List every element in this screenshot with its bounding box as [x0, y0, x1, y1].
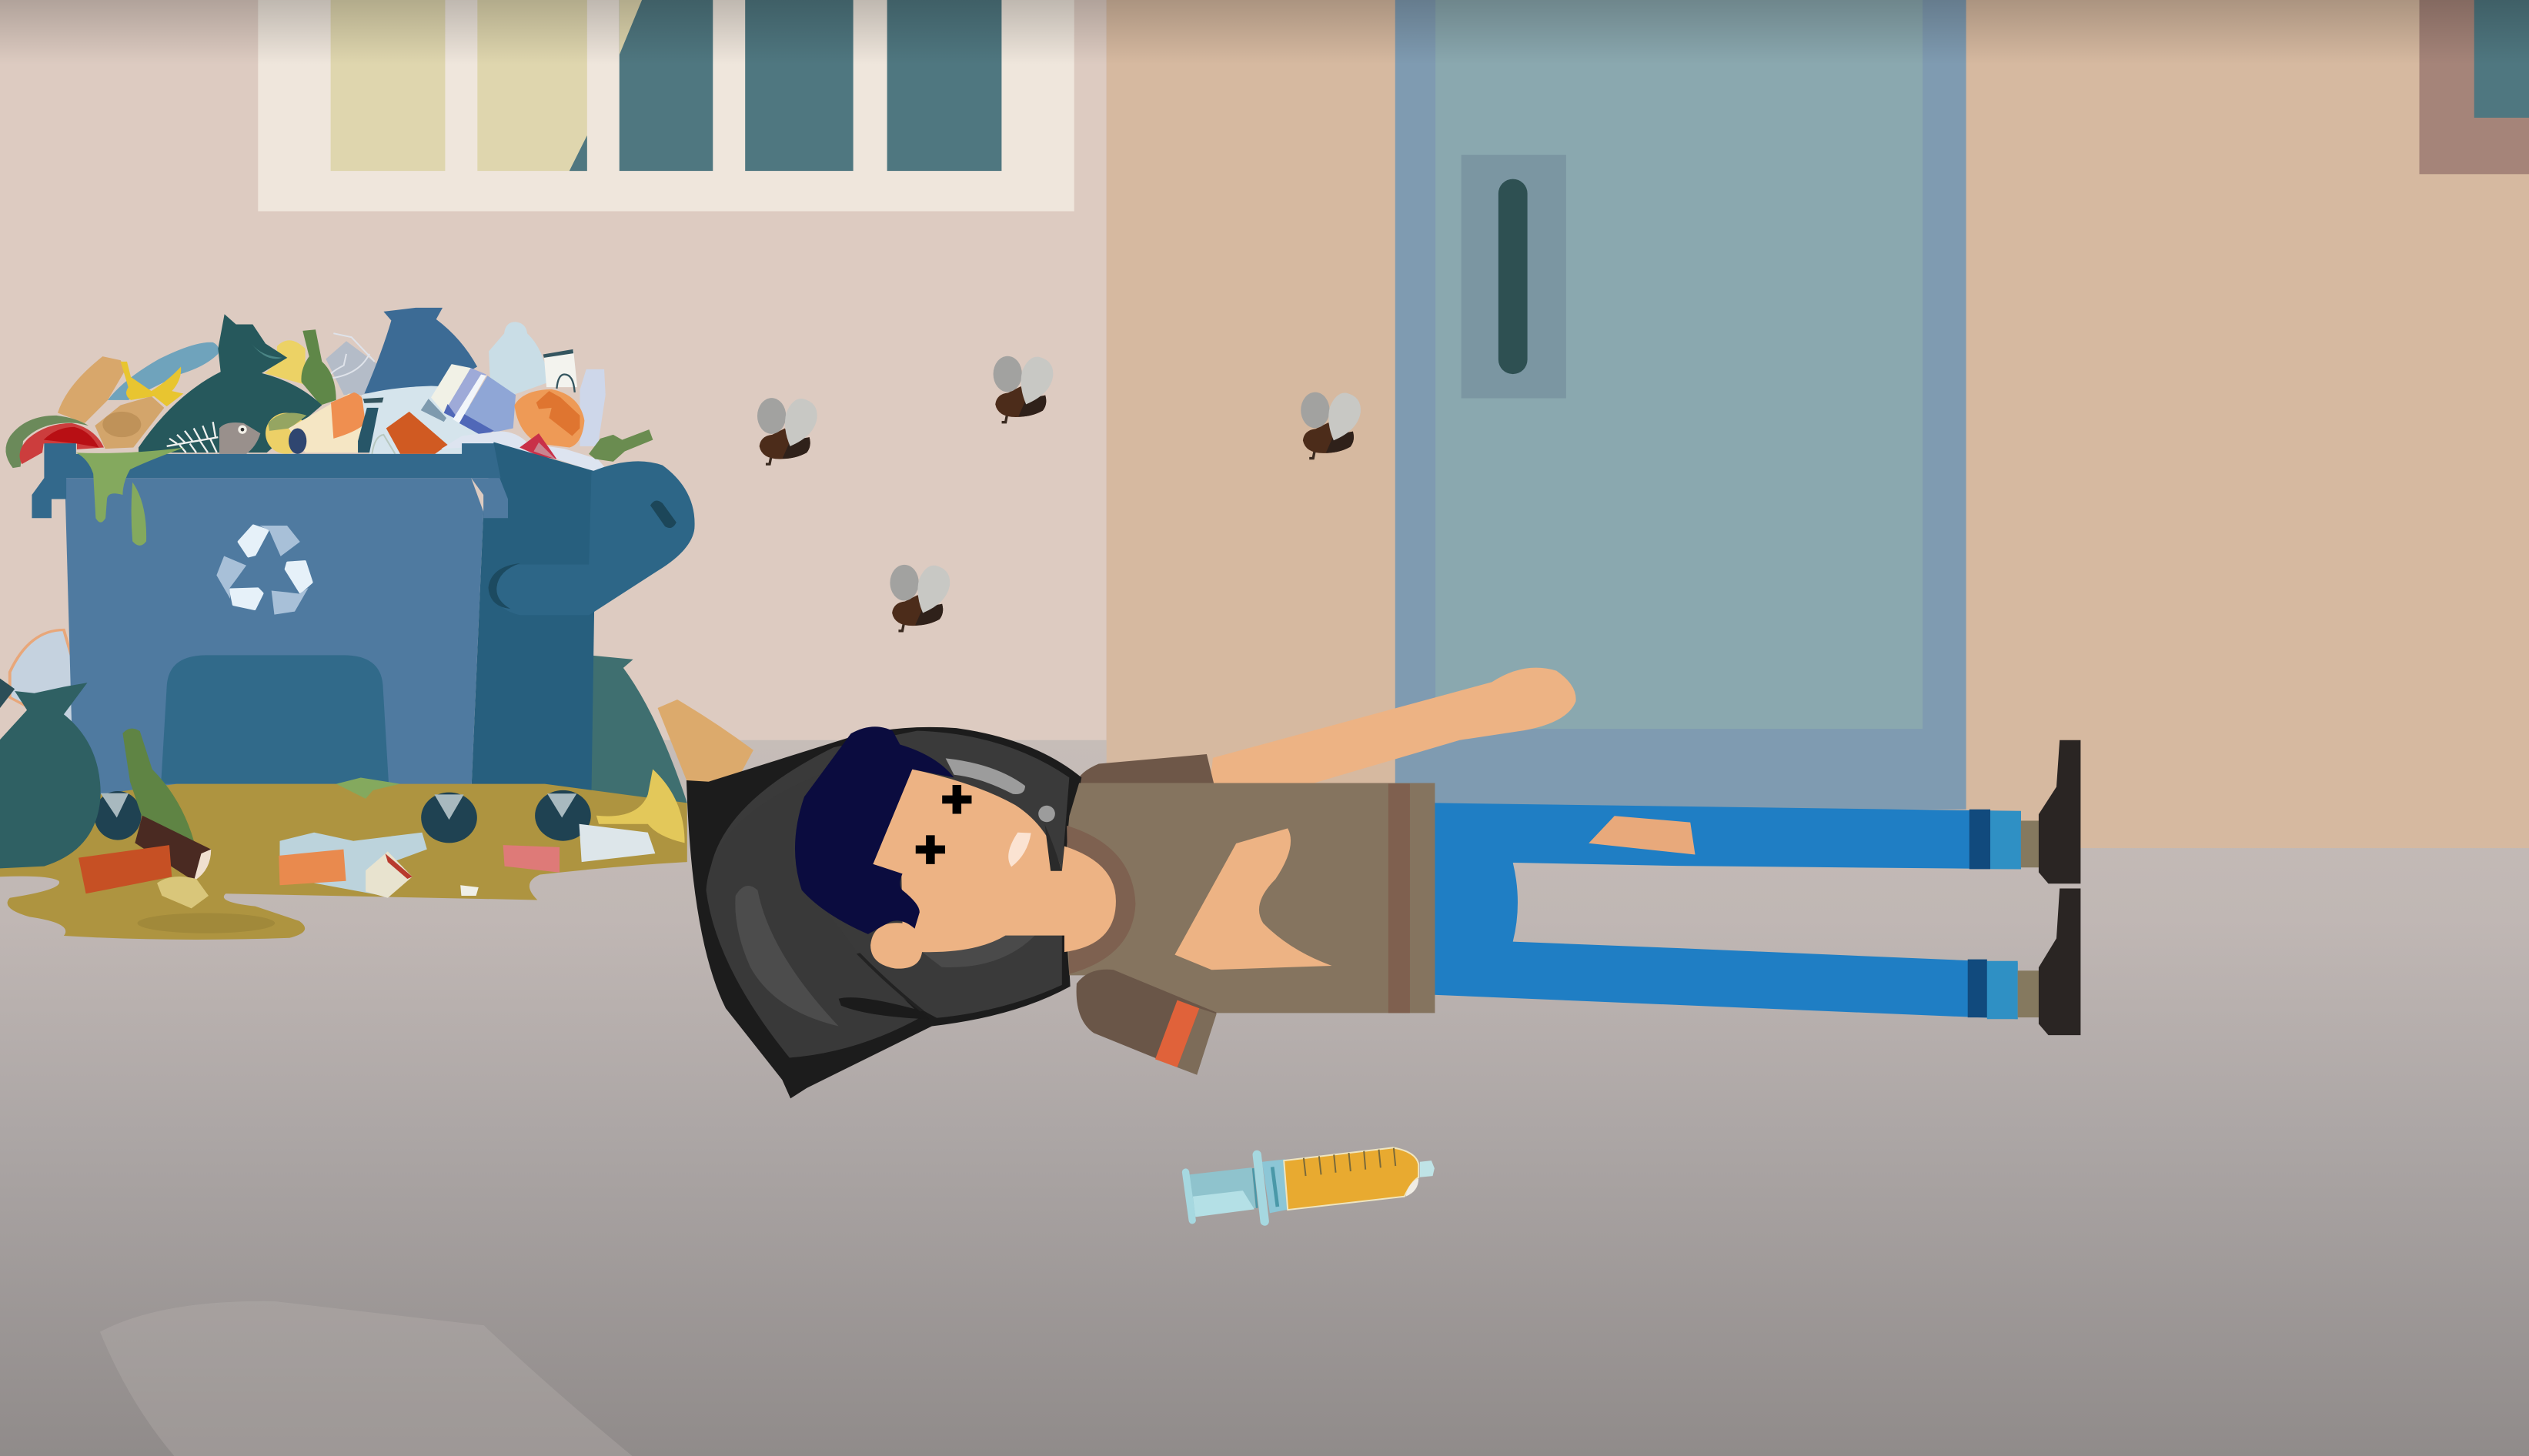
dark cup — [135, 816, 211, 881]
red cup — [79, 845, 172, 893]
arm — [1210, 668, 1576, 790]
syringe — [1186, 1147, 1435, 1221]
right wall — [1107, 0, 2529, 848]
wheels — [94, 790, 591, 843]
needle tip — [1420, 1160, 1435, 1177]
top shadow — [0, 0, 2529, 65]
bag edge beside the cheek — [1044, 824, 1062, 871]
dumpster handle shadow — [489, 563, 520, 609]
face and neck — [870, 770, 1116, 969]
dumpster body front — [65, 478, 483, 794]
glass jar — [579, 824, 655, 862]
white box — [543, 349, 577, 392]
apple skin — [386, 853, 413, 879]
green bottle — [301, 329, 336, 406]
collar — [1067, 826, 1135, 974]
neck mark — [1272, 1167, 1278, 1207]
small green bottle — [589, 429, 653, 462]
socks — [2018, 820, 2040, 1017]
door handle plate — [1462, 155, 1566, 399]
cup rim — [194, 850, 211, 881]
rear garbage bag and paper bag — [10, 630, 753, 816]
green slime — [76, 448, 184, 546]
pavement — [0, 740, 2529, 1456]
crossed eyes — [916, 785, 971, 864]
pant cuffs — [1968, 810, 2021, 1019]
trash heap, right part — [358, 308, 653, 472]
dark box — [358, 408, 379, 452]
bag behind — [0, 679, 15, 708]
hair — [795, 726, 954, 934]
red mug — [372, 412, 448, 454]
dumpster handle — [493, 461, 695, 615]
plastic bag on pavement — [100, 1301, 632, 1456]
white plastic — [441, 431, 604, 472]
chest skin — [1174, 828, 1332, 970]
paper scrap — [460, 885, 479, 896]
tube rubbish — [289, 392, 369, 454]
plastic bag — [362, 386, 493, 454]
banana peel — [121, 362, 183, 406]
bag highlights — [706, 731, 1069, 1058]
red packet — [519, 433, 556, 459]
dark teal garbage bag — [139, 314, 322, 452]
sleeve stripe — [1155, 1000, 1199, 1067]
apple core — [366, 851, 413, 898]
recycling symbol — [210, 526, 319, 623]
pale bottle — [580, 369, 606, 446]
lower sleeve — [1077, 970, 1217, 1075]
shirt — [1066, 783, 1435, 1013]
barrel shoulder — [1406, 1178, 1418, 1197]
cheese wheel — [266, 413, 306, 454]
orange label — [279, 850, 346, 885]
pink can — [503, 845, 560, 873]
door panel — [1435, 0, 1923, 729]
paper bag — [58, 356, 164, 449]
black plastic bag — [687, 727, 1081, 1098]
eye shine — [1008, 833, 1031, 867]
bag shine small — [1038, 806, 1055, 822]
head, bag and torso — [687, 726, 1435, 1098]
bag highlight — [252, 344, 282, 359]
orange mesh ball — [514, 389, 584, 447]
crushed bottle — [279, 833, 427, 896]
yellow bag — [264, 340, 306, 385]
sleeve end — [1178, 1008, 1217, 1075]
pants — [1434, 803, 2021, 1019]
door handle — [1498, 179, 1528, 374]
banana peel — [596, 769, 685, 843]
door — [1395, 0, 1966, 810]
collapsed person — [687, 668, 2080, 1098]
door frame — [1395, 0, 1966, 810]
barrel flange — [1257, 1154, 1264, 1221]
spilled puddle — [0, 784, 687, 940]
dumpster recess — [161, 655, 389, 784]
window — [258, 0, 1074, 211]
shirt stripe — [1388, 783, 1410, 1013]
dark blue garbage bag — [364, 308, 477, 394]
wine bottle — [122, 729, 194, 841]
dumpster handle hole — [650, 501, 677, 528]
green slime on the ground — [336, 777, 400, 799]
handle piece — [363, 398, 383, 403]
clear plastic bottle — [489, 322, 549, 395]
second window corner — [2419, 0, 2529, 174]
yellow fluid barrel — [1284, 1147, 1418, 1210]
barrel neck — [1262, 1159, 1289, 1213]
measure ticks — [1304, 1148, 1395, 1176]
right lip of the rim — [471, 478, 508, 518]
milk carton — [421, 364, 516, 436]
dumpster and floor garbage — [0, 442, 753, 940]
bag shine — [946, 758, 1025, 794]
pants knee patch — [1589, 816, 1695, 854]
plunger — [1186, 1167, 1257, 1221]
fish skeleton — [167, 422, 218, 452]
flies — [757, 356, 1361, 631]
watermelon slice — [5, 416, 104, 468]
dumpster rim — [32, 443, 500, 518]
trash heap, left part — [5, 314, 377, 468]
fish head — [219, 422, 260, 454]
left garbage bag — [0, 683, 101, 868]
blue board — [108, 342, 219, 400]
sleeve upper — [1077, 754, 1214, 784]
rotten pear — [157, 877, 209, 908]
shoes — [2039, 740, 2080, 1035]
grey wire rubbish — [326, 333, 377, 395]
foreground garbage — [0, 679, 685, 908]
dark puddle patch — [138, 913, 275, 933]
left wall — [0, 0, 1107, 745]
window frame — [258, 0, 1074, 211]
dumpster side — [471, 442, 596, 794]
window panes — [331, 0, 1001, 171]
